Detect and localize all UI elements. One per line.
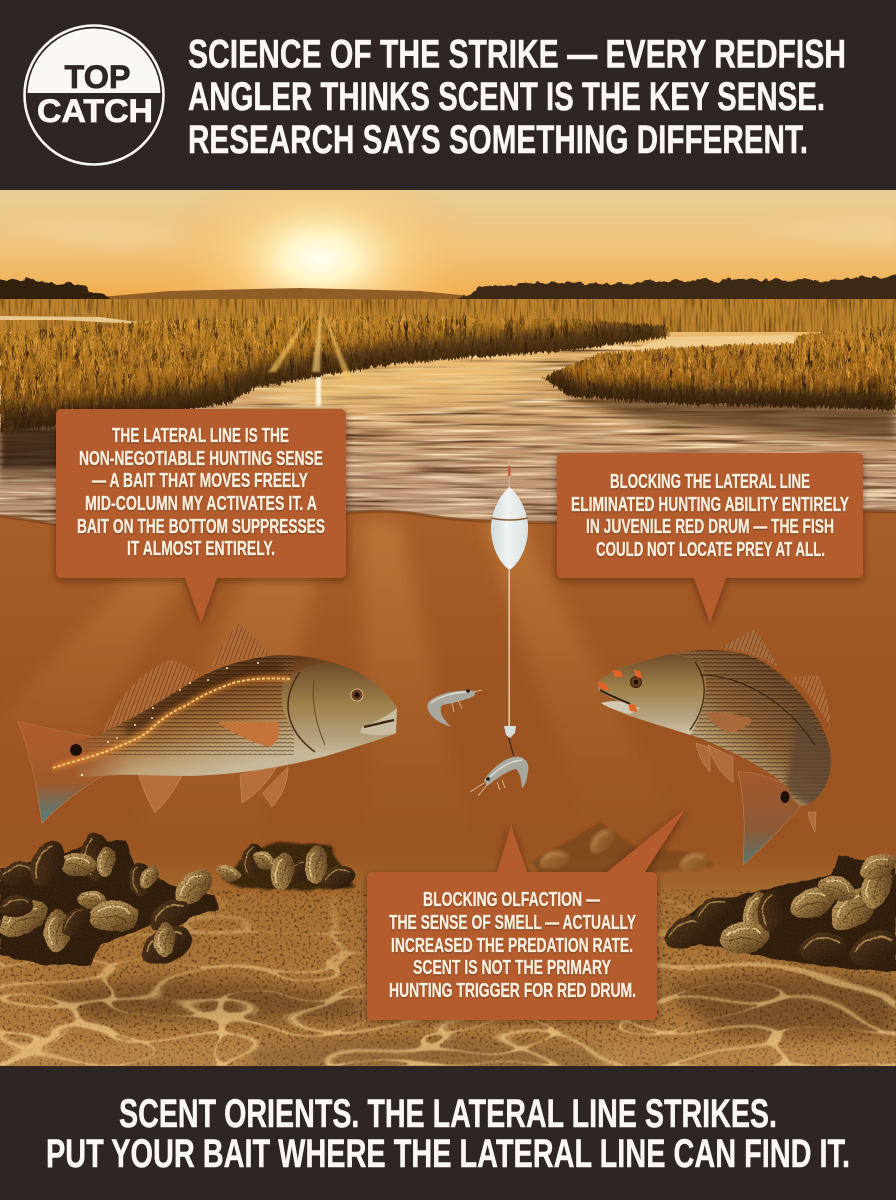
logo: Top Catch badge: CATCH: [37, 93, 153, 129]
pectoral fin: [218, 722, 279, 747]
marsh flats: [0, 299, 896, 359]
sensory dots: [81, 662, 259, 776]
tree lines: [0, 277, 896, 303]
dorsal fins: [721, 630, 830, 727]
callout: lateral line is non-negotiable: IT ALMOST ENTIRELY.: [127, 538, 275, 560]
callout: lateral line is non-negotiable: [56, 409, 346, 623]
eye: [351, 689, 363, 701]
scene: underwater: [0, 511, 896, 1066]
callout: lateral line is non-negotiable: THE LATERAL LINE IS THE: [112, 425, 289, 447]
header band: [23, 24, 844, 166]
tail spot: [780, 791, 790, 803]
mouth: [360, 708, 397, 735]
water surface: [0, 332, 896, 528]
head: [596, 654, 706, 736]
float: [491, 487, 528, 570]
sandy bottom: [0, 850, 896, 1066]
callout: lateral line is non-negotiable: — A BAIT THAT MOVES FREELY: [92, 470, 308, 492]
oyster cluster: middle reef: [213, 840, 356, 893]
footer band: [0, 1066, 896, 1200]
callout: blocking olfaction: HUNTING TRIGGER FOR RED DRUM.: [389, 980, 636, 1002]
callout: lateral line is non-negotiable: NON-NEGOTIABLE HUNTING SENSE: [79, 448, 323, 470]
light caustics: [0, 885, 896, 1066]
callout: blocking olfaction: [367, 808, 686, 1020]
callout: blocking olfaction: BLOCKING OLFACTION —: [423, 889, 600, 911]
callout: lateral line is non-negotiable: BAIT ON THE BOTTOM SUPPRESSES: [77, 516, 325, 538]
tail fin: [18, 722, 105, 823]
dorsal fins: [103, 623, 270, 733]
marsh: left bank: [0, 314, 670, 434]
callout: lateral line is non-negotiable: MID-COLUMN MY ACTIVATES IT. A: [85, 493, 317, 515]
oyster cluster: right reef: [663, 852, 896, 972]
lower fins: [138, 765, 288, 813]
callout: blocking the lateral line: [557, 453, 863, 623]
line: [508, 570, 510, 728]
eye: [630, 676, 642, 688]
logo: Top Catch badge: [20, 20, 170, 164]
sun glints: [268, 300, 352, 380]
sun: [204, 190, 436, 292]
marsh: right bank: [540, 322, 896, 414]
dark blocked line: [700, 675, 815, 745]
footer takeaway text: [46, 1092, 850, 1176]
oyster: single shell: [138, 920, 194, 967]
scene: sunset marsh above water: [0, 190, 896, 524]
fish: left redfish with glowing lateral line: [18, 623, 400, 823]
callout: blocking olfaction: INCREASED THE PREDATION RATE.: [391, 935, 633, 957]
lower fins: [696, 743, 816, 832]
logo: Top Catch badge: TOP: [64, 59, 130, 95]
fish: right redfish with blocked lateral line: [596, 630, 840, 865]
orange blocking tabs: [598, 669, 642, 712]
callout: blocking olfaction: THE SENSE OF SMELL — ACTUALLY: [389, 912, 636, 934]
shrimp on hook: [470, 757, 528, 796]
hook: [509, 738, 514, 756]
callout: blocking olfaction: SCENT IS NOT THE PRIMARY: [413, 957, 611, 979]
float rig with bait: [470, 462, 528, 796]
shrimp: free swimming: [428, 689, 482, 727]
waterline: [0, 511, 896, 525]
body: [598, 650, 831, 806]
body: [74, 655, 397, 777]
float stem: [508, 462, 510, 488]
bank reflections: [0, 415, 240, 470]
small back pool: [0, 316, 198, 326]
oyster cluster: left reef: [0, 830, 219, 965]
head: [281, 663, 400, 762]
tail fin: [738, 772, 800, 865]
pectoral fin: [705, 713, 753, 733]
light rays: [52, 518, 604, 724]
tail spot: [70, 744, 82, 756]
lateral line glow: [53, 678, 290, 768]
swivel: [504, 726, 516, 738]
mouth: [601, 701, 640, 714]
title: [188, 32, 846, 162]
oyster cluster: far reef: [530, 822, 716, 874]
